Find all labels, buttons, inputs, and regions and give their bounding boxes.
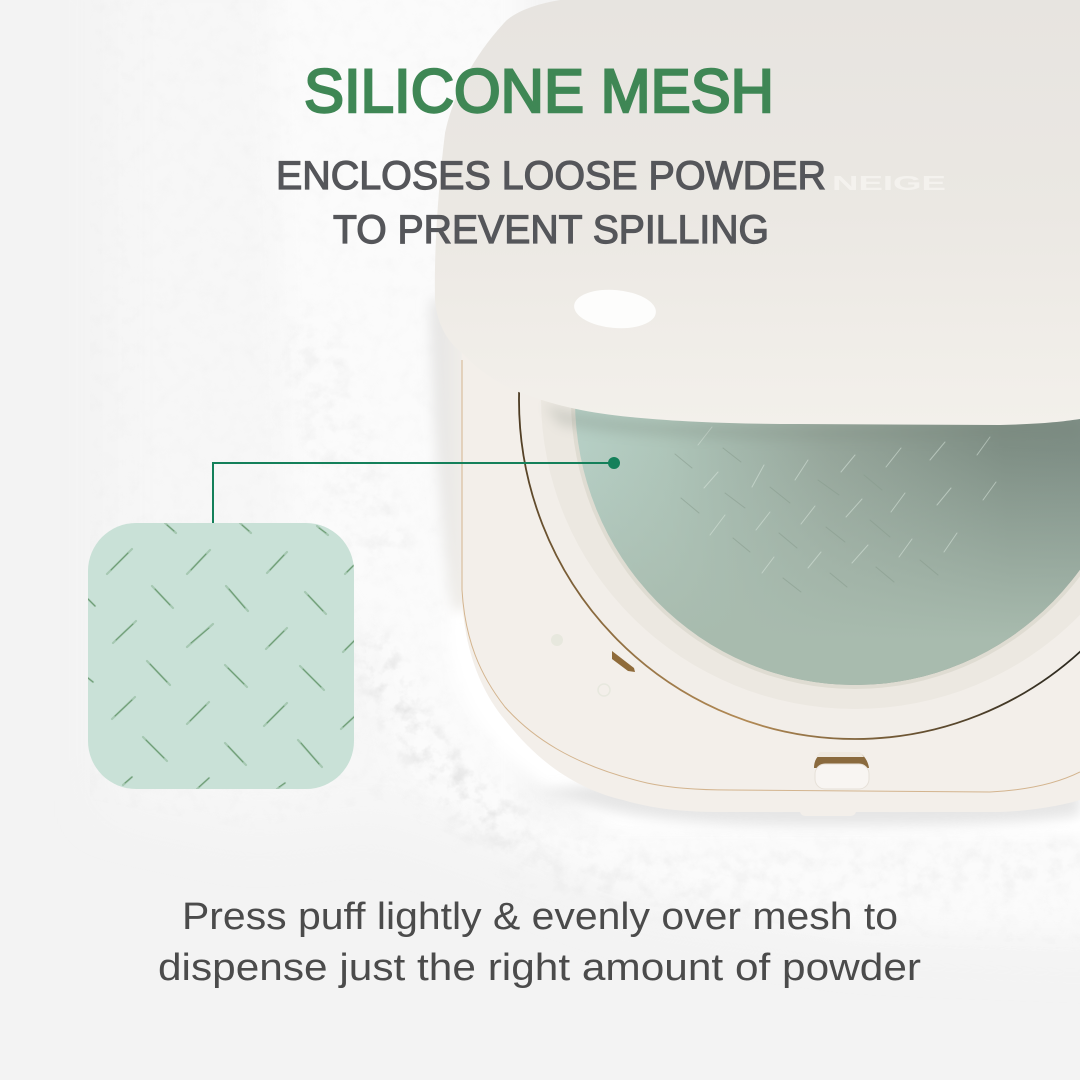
connector line with dot [213, 457, 620, 524]
inner ring edge [571, 408, 1080, 689]
background: loose powder surface [380, 606, 1080, 842]
mesh close-up tile [88, 523, 355, 789]
mesh lower light [616, 483, 1080, 685]
lid brand mark: NEIGE [832, 173, 946, 195]
silicone mesh surface [575, 408, 1080, 685]
latch slot [814, 752, 869, 768]
compact base [462, 350, 1080, 812]
subheading [276, 154, 826, 252]
compact product [430, 0, 1080, 826]
tile slits soft edge [88, 523, 355, 789]
subheading line 2: TO PREVENT SPILLING [333, 208, 769, 252]
caption line 2: dispense just the right amount of powder [158, 947, 921, 989]
embossed mesh slits light [698, 427, 996, 573]
gold trim line [462, 360, 1080, 792]
latch slot light [816, 752, 864, 757]
lid shadow on well [545, 405, 1080, 439]
heading: SILICONE MESH [304, 57, 774, 125]
bottom hinge tab [800, 806, 856, 816]
subheading line 1: ENCLOSES LOOSE POWDER [276, 154, 826, 198]
inner well [518, 392, 1080, 740]
gold ring [518, 392, 1080, 740]
small dot marks [551, 634, 610, 696]
tile slits [88, 525, 355, 787]
hinge notch [612, 651, 635, 672]
lid [435, 0, 1080, 425]
latch button [815, 764, 869, 789]
caption line 1: Press puff lightly & evenly over mesh to [182, 896, 898, 938]
side wall shadow [430, 300, 470, 610]
lid highlight [573, 286, 657, 332]
usage caption [158, 896, 921, 989]
inner ring [541, 87, 1080, 709]
compact soft shadow [540, 780, 1080, 826]
embossed mesh slits dark [675, 448, 938, 592]
